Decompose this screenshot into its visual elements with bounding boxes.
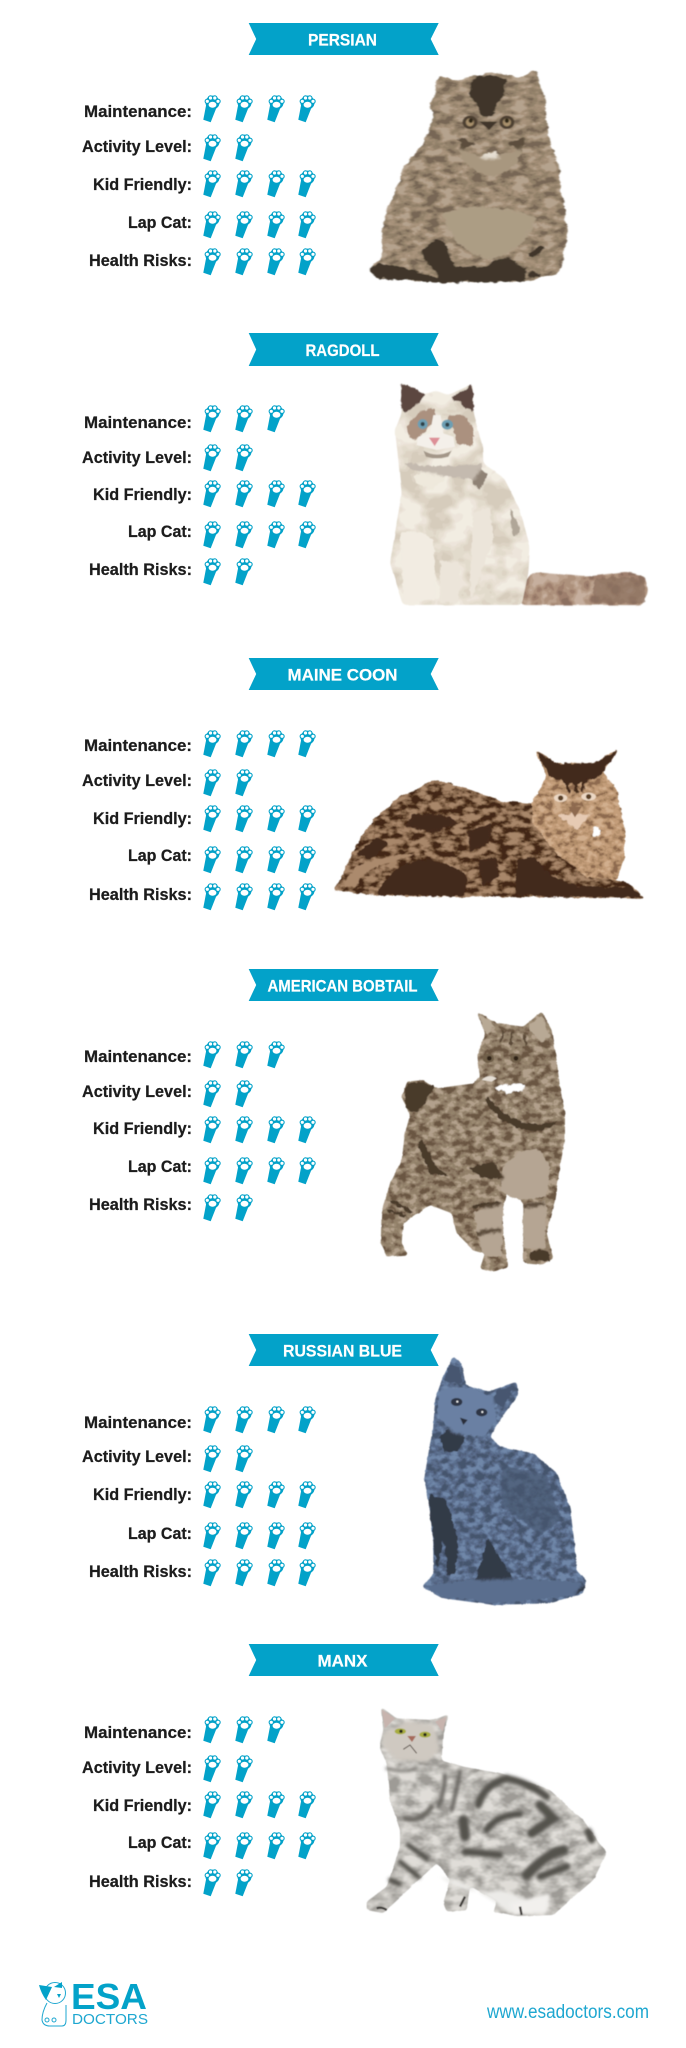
row: Lap Cat — [128, 1522, 316, 1549]
icon: dog — [39, 1982, 66, 2026]
row: Activity Level: Activity Level: — [82, 1758, 192, 1777]
row: Kid Friendly: Kid Friendly: — [93, 485, 192, 504]
row: Maintenance: Maintenance: — [84, 413, 192, 432]
row: Maintenance: Maintenance: — [84, 1723, 192, 1742]
row: Kid Friendly: Kid Friendly: — [93, 1796, 192, 1815]
ribbon: Manx — [249, 1644, 439, 1676]
section: Manx — [82, 1644, 607, 1917]
row: Activity Level — [82, 134, 253, 161]
cat: Ragdoll — [390, 383, 648, 605]
ribbon: Persian — [249, 23, 439, 55]
row: Health Risks: Health Risks: — [89, 885, 192, 904]
cat: Russian Blue — [422, 1356, 586, 1605]
ribbon: Ragdoll — [249, 333, 439, 366]
row: Kid Friendly — [93, 805, 316, 832]
row: Kid Friendly — [93, 1116, 316, 1143]
row: Health Risks: Health Risks: — [89, 560, 192, 579]
row: Kid Friendly — [93, 1791, 316, 1818]
row: Kid Friendly: Kid Friendly: — [93, 809, 192, 828]
row: Lap Cat — [128, 211, 316, 238]
row: Kid Friendly — [93, 1481, 316, 1508]
row: Kid Friendly: Kid Friendly: — [93, 175, 192, 194]
row: Activity Level — [82, 769, 253, 796]
row: Maintenance: Maintenance: — [84, 736, 192, 755]
row: Activity Level: Activity Level: — [82, 137, 192, 156]
row: Health Risks: Health Risks: — [89, 1562, 192, 1581]
row: Activity Level — [82, 1445, 253, 1472]
row: Health Risks: Health Risks: — [89, 1872, 192, 1891]
row: Maintenance — [84, 95, 316, 122]
ribbon: Russian Blue: RUSSIAN BLUE — [283, 1342, 402, 1360]
row: Kid Friendly: Kid Friendly: — [93, 1119, 192, 1138]
ribbon: Russian Blue — [249, 1334, 439, 1366]
ribbon: American Bobtail: AMERICAN BOBTAIL — [268, 976, 418, 996]
row: Health Risks — [89, 558, 253, 585]
row: Lap Cat: Lap Cat: — [128, 1833, 192, 1852]
row: Activity Level: Activity Level: — [82, 448, 192, 467]
row: Kid Friendly — [93, 170, 316, 197]
row: Lap Cat: Lap Cat: — [128, 846, 192, 865]
row: Health Risks: Health Risks: — [89, 1195, 192, 1214]
row: Health Risks: Health Risks: — [89, 251, 192, 270]
row: Activity Level — [82, 444, 253, 471]
ribbon: Persian: PERSIAN — [308, 30, 377, 50]
ribbon: Maine Coon: MAINE COON — [288, 666, 398, 684]
cat: Persian — [369, 70, 568, 283]
cat: Manx — [367, 1707, 607, 1917]
row: Activity Level — [82, 1080, 253, 1107]
row: Health Risks — [89, 883, 316, 910]
wordmark: ESA — [71, 1976, 147, 2017]
row: Lap Cat: Lap Cat: — [128, 522, 192, 541]
row: Maintenance: Maintenance: — [84, 1413, 192, 1432]
row: Activity Level: Activity Level: — [82, 1447, 192, 1466]
row: Activity Level — [82, 1755, 253, 1782]
row: Maintenance — [84, 405, 285, 432]
ribbon: Maine Coon — [249, 658, 439, 690]
row: Health Risks — [89, 1559, 316, 1586]
row: Lap Cat — [128, 846, 316, 873]
section: Maine Coon — [82, 658, 645, 910]
url: www.esadoctors.com — [486, 2002, 649, 2023]
row: Lap Cat — [128, 521, 316, 548]
ribbon: Manx: MANX — [318, 1652, 368, 1670]
row: Maintenance — [84, 730, 316, 757]
row: Health Risks — [89, 1869, 253, 1896]
row: Kid Friendly: Kid Friendly: — [93, 1485, 192, 1504]
row: Health Risks — [89, 1194, 253, 1221]
row: Lap Cat: Lap Cat: — [128, 213, 192, 232]
row: Lap Cat — [128, 1157, 316, 1184]
sub wordmark: DOCTORS — [72, 2011, 148, 2028]
row: Maintenance — [84, 1716, 285, 1743]
row: Lap Cat: Lap Cat: — [128, 1524, 192, 1543]
row: Lap Cat: Lap Cat: — [128, 1157, 192, 1176]
section: Persian — [82, 23, 568, 283]
row: Maintenance: Maintenance: — [84, 102, 192, 121]
logo: ESA Doctors — [39, 1976, 148, 2028]
ribbon: Ragdoll: RAGDOLL — [306, 341, 380, 360]
row: Health Risks — [89, 248, 316, 275]
section: American Bobtail — [82, 969, 565, 1272]
section: Russian Blue — [82, 1334, 586, 1605]
row: Activity Level: Activity Level: — [82, 1082, 192, 1101]
row: Maintenance — [84, 1041, 285, 1068]
section: Ragdoll — [82, 333, 648, 605]
cat: Maine Coon — [334, 749, 645, 898]
row: Kid Friendly — [93, 480, 316, 507]
row: Maintenance: Maintenance: — [84, 1047, 192, 1066]
ribbon: American Bobtail — [249, 969, 439, 1001]
row: Activity Level: Activity Level: — [82, 771, 192, 790]
row: Lap Cat — [128, 1832, 316, 1859]
row: Maintenance — [84, 1406, 316, 1433]
cat: American Bobtail — [381, 1012, 565, 1272]
